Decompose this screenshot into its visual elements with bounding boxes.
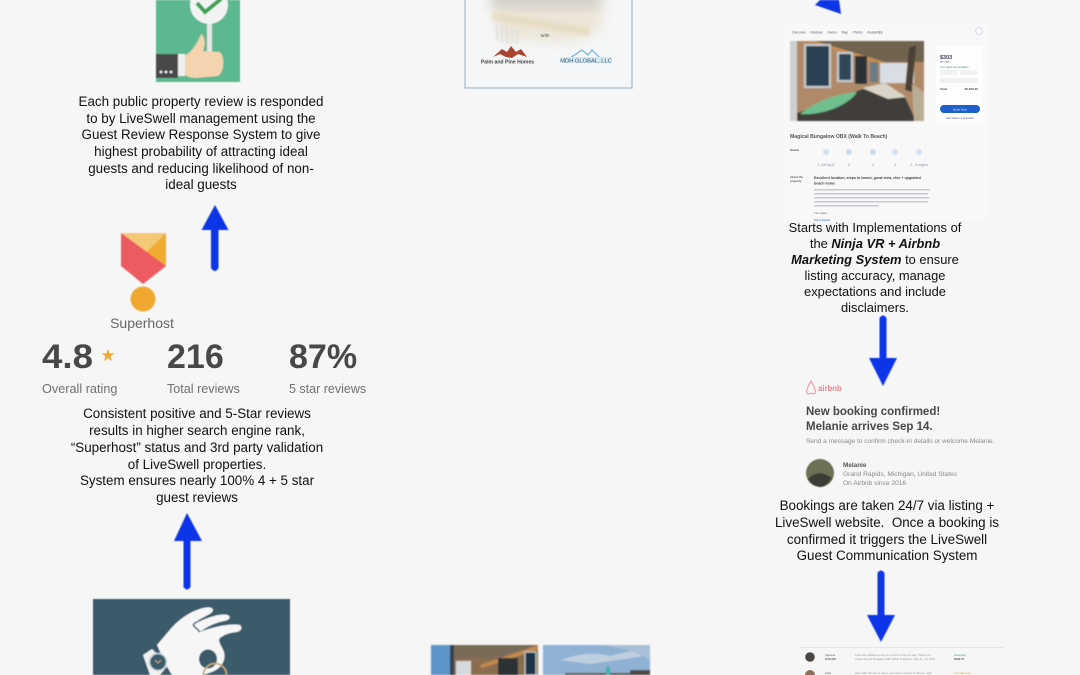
booking widget: Your dates are Available! xyxy=(940,65,969,69)
arrow: up to positive reviews xyxy=(174,513,202,590)
details row: Details xyxy=(790,148,800,152)
headline: New booking confirmed! xyxy=(806,406,940,418)
logo: palm and pine homes xyxy=(481,46,534,66)
stat: five star reviews: 87% xyxy=(289,338,357,376)
message row 2 xyxy=(805,670,971,675)
details row: 2 - 5 nights xyxy=(910,163,928,167)
screenshot: airbnb listing xyxy=(783,23,988,222)
stat: five star reviews: 5 star reviews xyxy=(289,382,366,396)
arrow: top right arrowhead xyxy=(815,0,841,14)
about the property: Excellent location, steps to beach, great view, chic + upgraded xyxy=(814,176,921,180)
stat: total reviews: 216 xyxy=(167,338,224,376)
message row 1: $302.72 xyxy=(954,657,965,661)
guest details xyxy=(843,462,958,487)
about the property: beach home xyxy=(814,182,835,186)
booking widget: Ask Owner a Question xyxy=(946,116,974,120)
text: guest review response: to by LiveSwell management using the xyxy=(86,111,316,126)
text: bookings: Guest Communication System xyxy=(797,548,977,563)
arrow: up to review response xyxy=(202,205,228,271)
details row xyxy=(790,148,928,167)
headline: Melanie arrives Sep 14. xyxy=(806,421,933,433)
text: guest review response: guests and reducing likelihood of non- xyxy=(88,161,314,176)
text: guest review response: ideal guests xyxy=(165,177,237,192)
about the property: About the xyxy=(790,175,803,179)
stat: overall rating xyxy=(42,338,117,396)
text: bookings: LiveSwell website. Once a booking is xyxy=(775,515,999,530)
airbnb logo xyxy=(807,381,842,394)
text: guest review response: Guest Review Response System to give xyxy=(82,127,320,142)
listing photo xyxy=(790,41,924,121)
stat: overall rating: ★ xyxy=(100,346,116,365)
text: ninja vr system: disclaimers. xyxy=(841,300,909,315)
booking widget: $303 xyxy=(940,55,952,61)
screenshot: guest messages table xyxy=(800,647,1004,675)
message row 1: Looks like Melanie wrote you a note for Sep 14 stay. Thank you! xyxy=(855,653,931,657)
nav tabs: Overview Reviews Owner Map Photos Availability xyxy=(792,30,883,34)
details row: 1,200 sq ft xyxy=(818,163,834,167)
logo: palm and pine homes: Palm and Pine Homes xyxy=(481,60,534,66)
text: ninja vr system: Starts with Implementations of xyxy=(789,220,962,235)
guest details: On Airbnb since 2016 xyxy=(843,480,906,487)
listing title: Magical Bungalow OBX (Walk To Beach) xyxy=(790,134,888,140)
subtext: Send a message to confirm check-in details or welcome Melanie. xyxy=(806,438,995,445)
text: positive reviews: “Superhost” status and 3rd party validation xyxy=(71,440,323,455)
stat: overall rating: Overall rating xyxy=(42,382,117,396)
message row 1: Accepted xyxy=(954,653,966,657)
guest avatar xyxy=(806,459,834,487)
guest details: Grand Rapids, Michigan, United States xyxy=(843,471,958,478)
text: ninja vr system: expectations and include xyxy=(804,284,946,299)
logo: mdh global llc: MDH GLOBAL, LLC xyxy=(560,58,612,64)
text: positive reviews: System ensures nearly 100% 4 + 5 star xyxy=(80,473,315,488)
text: with: With xyxy=(540,33,550,38)
text: ninja vr system xyxy=(783,220,988,315)
booking widget: Total xyxy=(940,87,947,91)
text: guest review response: highest probability of attracting ideal xyxy=(94,144,308,159)
photo: beach house sky xyxy=(543,645,650,675)
guest details: Melanie xyxy=(843,462,867,469)
booking widget: $5,303.00 xyxy=(965,87,978,91)
message row 1: Spencer xyxy=(825,653,835,657)
icon: thumbs up with check sign xyxy=(156,0,240,82)
text: positive reviews: of LiveSwell properties. xyxy=(128,457,266,472)
airbnb logo: airbnb xyxy=(818,384,842,393)
details row: 3 xyxy=(894,163,896,167)
stat: total reviews xyxy=(167,338,240,396)
label: superhost: Superhost xyxy=(110,315,174,331)
about the property: The space xyxy=(814,211,828,215)
headline xyxy=(806,406,940,433)
booking widget: per night xyxy=(940,60,950,64)
text: positive reviews xyxy=(71,406,323,505)
photo: porch xyxy=(431,645,538,675)
icon: hand holding ring xyxy=(93,599,290,675)
text: guest review response xyxy=(79,94,323,192)
icon: superhost medal xyxy=(121,233,166,312)
about the property xyxy=(790,175,930,222)
details row: 9 xyxy=(848,163,850,167)
about the property: Show Details xyxy=(814,218,831,222)
message row 1: 3:23 AM xyxy=(825,657,836,661)
text: positive reviews: results in higher search engine rank, xyxy=(89,423,305,438)
message row 2: Holly xyxy=(825,671,832,675)
message row 2: Hey Holly! We do not stay in your home until the of 400 per night xyxy=(855,671,932,675)
stat: five star reviews xyxy=(289,338,366,396)
message row 1: Ocean Breeze Bungalow OBX (Walk To Beach) · Sep 11 - 14, 2019 xyxy=(855,657,936,661)
text: ninja vr system: listing accuracy, manage xyxy=(805,268,945,283)
cover: palm and pine homes document xyxy=(465,0,632,88)
stat: total reviews: Total reviews xyxy=(167,382,240,396)
cover photo: faded deck xyxy=(492,0,602,44)
text: bookings: confirmed it triggers the LiveSwell xyxy=(787,532,987,547)
arrow: down to communication xyxy=(867,570,895,642)
message row 2: Pre-approved xyxy=(954,671,971,675)
booking widget: Book Now xyxy=(953,108,968,112)
about the property: property xyxy=(790,179,802,183)
booking widget xyxy=(936,46,983,123)
text: ninja vr system: the Ninja VR + Airbnb xyxy=(810,236,940,251)
text: positive reviews: Consistent positive and 5-Star reviews xyxy=(83,406,311,421)
text: bookings xyxy=(775,498,999,563)
text: bookings: Bookings are taken 24/7 via listing + xyxy=(780,498,995,513)
message row 1 xyxy=(805,652,966,662)
email: airbnb booking confirmation xyxy=(806,381,995,487)
text: ninja vr system: Marketing System to ensure xyxy=(791,252,959,267)
details row: 4 xyxy=(872,163,874,167)
arrow: down to booking xyxy=(869,316,897,386)
text: guest review response: Each public property review is responded xyxy=(79,94,323,109)
text: positive reviews: guest reviews xyxy=(156,490,238,505)
logo: mdh global llc xyxy=(560,50,612,64)
stat: overall rating: 4.8 xyxy=(42,338,93,376)
